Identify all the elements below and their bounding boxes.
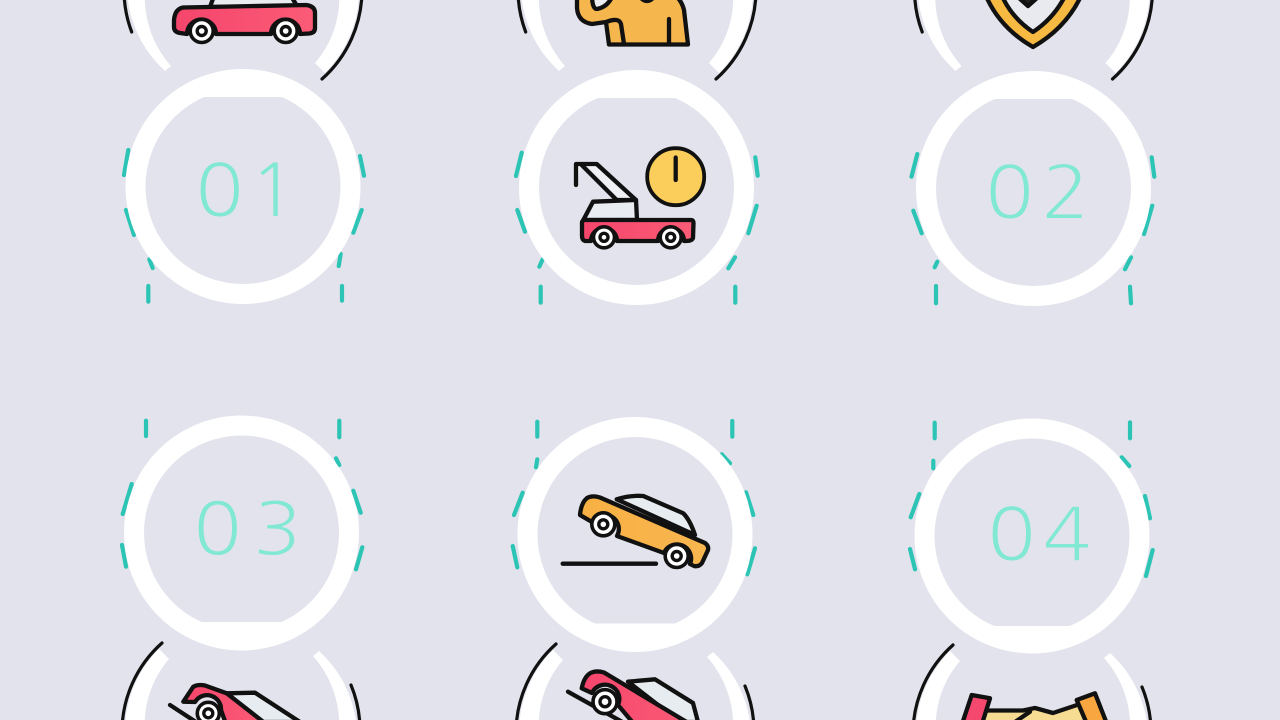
panel: tow truck ring bbox=[516, 80, 758, 303]
teal dashes bbox=[513, 421, 755, 574]
panel: orange car ring bbox=[513, 421, 755, 642]
wheels bbox=[594, 227, 681, 248]
panel: bottom-right handshake arc and icon bbox=[913, 645, 1151, 720]
panel: 01 number ring bbox=[124, 79, 364, 302]
clock bbox=[647, 148, 704, 205]
partial ring below 04 bbox=[913, 645, 1151, 720]
white ring bbox=[926, 81, 1141, 296]
cabin bbox=[583, 200, 637, 220]
number 04: 04 bbox=[987, 500, 1091, 572]
panel: top-centre person arc and icon bbox=[518, 0, 756, 79]
number 03: 03 bbox=[193, 494, 302, 566]
panel: bottom-left crashed car arc and icon bbox=[122, 643, 360, 720]
icon: orange car tipping off ledge bbox=[563, 496, 708, 568]
crane bbox=[576, 164, 636, 200]
icon: handshake bbox=[962, 693, 1107, 720]
truck bed bbox=[582, 220, 694, 241]
partial ring above tow truck bbox=[518, 0, 756, 79]
panel: 03 number ring bbox=[122, 421, 362, 640]
wheels bbox=[592, 513, 688, 568]
panel: top-left car arc and icon bbox=[124, 0, 362, 79]
number 01: 01 bbox=[195, 156, 297, 228]
teal dashes bbox=[124, 150, 364, 302]
icon: person bbox=[577, 0, 688, 44]
partial ring below orange car bbox=[516, 644, 754, 720]
icon: shield bbox=[986, 0, 1081, 47]
teal dashes bbox=[910, 422, 1153, 576]
teal dashes bbox=[122, 421, 362, 569]
cabin bbox=[617, 496, 695, 535]
icon: red car bbox=[174, 0, 315, 42]
teal dashes bbox=[516, 153, 758, 303]
partial ring above 02 bbox=[914, 0, 1152, 79]
white ring bbox=[528, 427, 742, 642]
panel: bottom-centre crashed car arc and icon bbox=[516, 644, 754, 720]
partial ring below 03 bbox=[122, 643, 360, 720]
number 02: 02 bbox=[985, 158, 1090, 230]
panel: 04 number ring bbox=[910, 422, 1153, 644]
partial ring above 01 bbox=[124, 0, 362, 79]
white ring bbox=[529, 80, 744, 295]
panel: 02 number ring bbox=[912, 81, 1154, 303]
car body bbox=[580, 496, 708, 566]
teal dashes bbox=[912, 154, 1154, 303]
icon: tow truck and clock bbox=[576, 148, 704, 248]
icon: red car on steep slope bbox=[568, 671, 698, 720]
icon: red car on slope bbox=[170, 685, 300, 720]
white ring bbox=[134, 426, 349, 640]
ground line bbox=[563, 562, 656, 566]
white ring bbox=[136, 79, 350, 294]
panel: top-right shield arc and icon bbox=[914, 0, 1152, 79]
white ring bbox=[924, 428, 1140, 644]
